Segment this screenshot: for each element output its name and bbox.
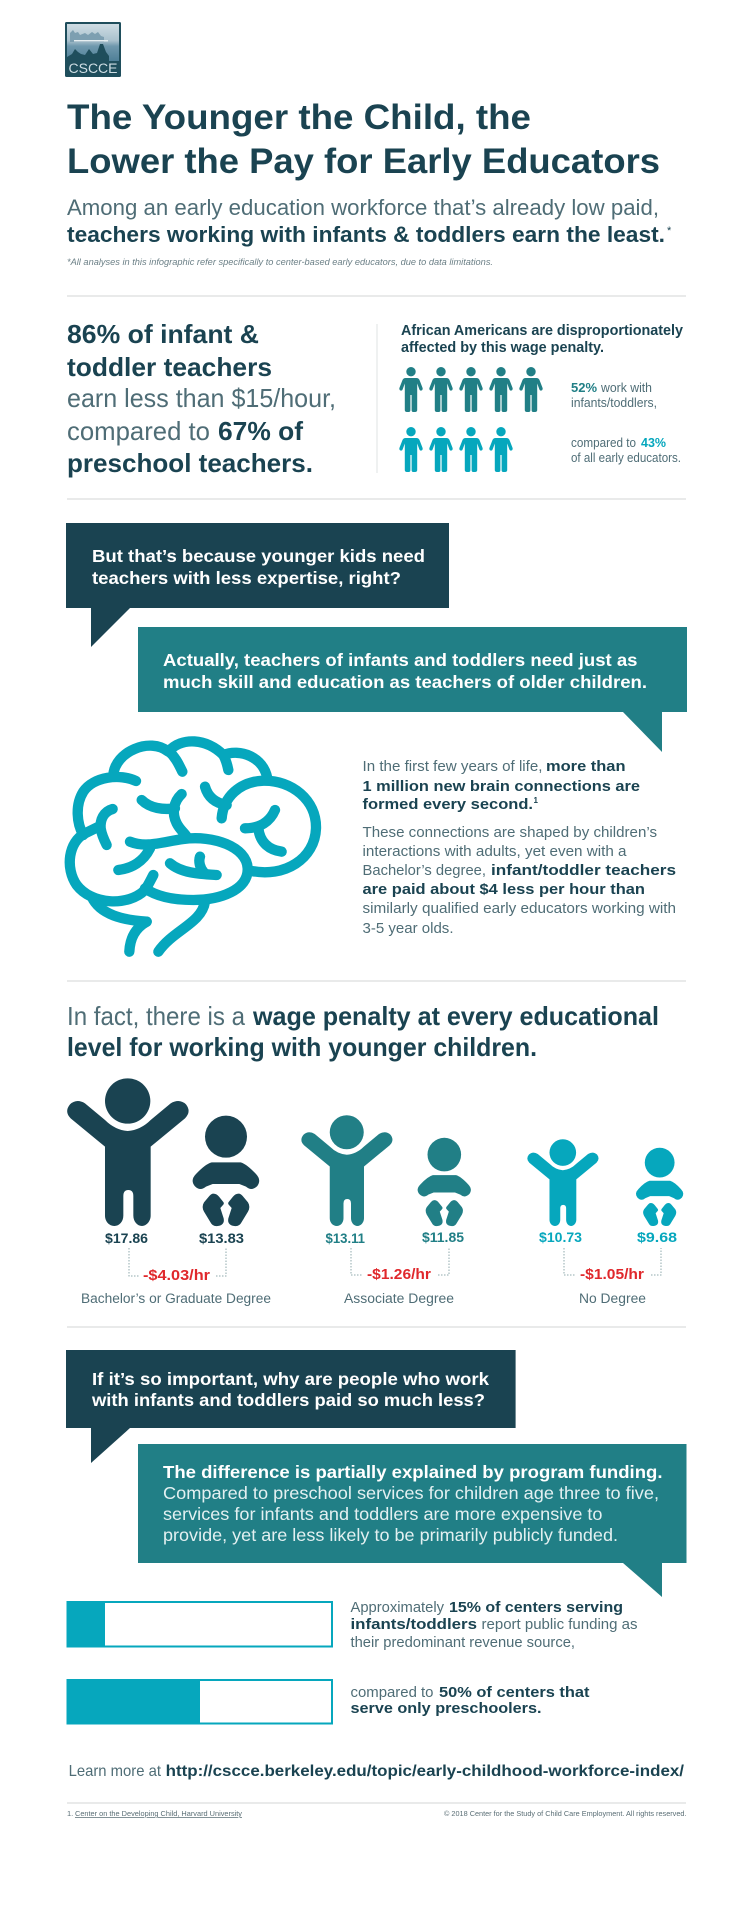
icon: baby, $11.85 [418,1138,471,1226]
icon: toddler, $13.11 [301,1115,392,1226]
text block: brain connections: In the first few years of life, [362,758,542,775]
speech bubble: answer 2: provide, yet are less likely to be primarily publicly funded. [163,1525,618,1545]
text: 52% work with infants/toddlers: 52% [571,380,597,395]
text: 15% of centers: Approximately [350,1599,444,1616]
speech bubble: question 1: But that’s because younger kids need [92,546,425,566]
speech bubble: answer 1: Actually, teachers of infants and toddlers need just as [163,650,638,670]
text: compared to 43% [571,435,681,465]
chart group: Bachelor's or Graduate Degree: Bachelor’s or Graduate Degree [81,1291,271,1306]
text: 52% work with infants/toddlers [571,380,657,410]
text: compared to 43%: 43% [641,435,666,450]
heading: wage penalty: level for working with younger children. [67,1032,537,1062]
icon row: 4 people, 43% [399,427,513,472]
chart group: Associate Degree [301,1115,471,1306]
chart group: Associate Degree: Associate Degree [344,1291,454,1306]
heading: African Americans: affected by this wage penalty. [401,340,604,356]
text: 15% of centers: report public funding as [482,1616,638,1633]
chart group: Bachelor's or Graduate Degree: -$4.03/hr [143,1268,210,1284]
footer [67,1809,686,1818]
chart group: Associate Degree: $13.11 [326,1231,365,1246]
speech bubble: question 2: If it’s so important, why are people who work [92,1369,489,1389]
text: 50% of centers [350,1684,590,1717]
text: 50% of centers: compared to [350,1684,434,1701]
heading: wage penalty [67,1001,659,1062]
speech bubble: question 2 [66,1350,516,1463]
text block: 86% statistic: earn less than $15/hour, [67,383,336,413]
text block: brain connections: These connections are shaped by children’s [362,824,657,841]
speech bubble: answer 2: The difference is partially explained by program funding. [163,1462,662,1482]
chart group: No Degree: $10.73 [539,1230,583,1245]
bar: 50% of centers [66,1679,332,1724]
subtitle: * [667,225,672,237]
speech bubble: question 2: with infants and toddlers paid so much less? [91,1390,485,1410]
title: Lower the Pay for Early Educators [67,141,660,181]
heading: wage penalty: In fact, there is a [67,1001,245,1031]
icon: toddler, $10.73 [527,1139,599,1226]
text block: brain connections [362,758,676,937]
chart group: No Degree [527,1139,683,1306]
text: 50% of centers: serve only preschoolers. [350,1700,542,1717]
text block: brain connections: interactions with adults, yet even with a [362,843,627,860]
icon row: 5 people, 52% [399,367,543,412]
chart group: No Degree: $9.68 [637,1230,678,1245]
icon: baby, $9.68 [636,1148,683,1226]
chart group: Bachelor's or Graduate Degree: $17.86 [105,1231,149,1246]
subtitle [67,195,672,247]
chart group: Associate Degree: -$1.26/hr [367,1267,431,1283]
learn more link: http://cscce.berkeley.edu/topic/early-childhood-workforce-index/ [166,1763,685,1780]
icon: baby, $13.83 [193,1116,259,1226]
speech bubble: answer 1: much skill and education as teachers of older children. [163,672,647,692]
heading: wage penalty: wage penalty at every educational [252,1001,659,1031]
icon: brain [70,741,316,952]
learn more link: Learn more at [69,1763,162,1780]
text block: brain connections: similarly qualified early educators working with [362,900,676,917]
text block: brain connections: formed every second. [362,796,533,813]
chart group: No Degree: No Degree [579,1291,646,1306]
text block: brain connections: 1 million new brain connections are [362,778,640,795]
chart group: Bachelor's or Graduate Degree: $13.83 [199,1231,245,1246]
text: compared to 43%: of all early educators. [571,450,681,465]
text: 50% of centers: 50% of centers that [439,1684,590,1701]
bar: 15% of centers [66,1601,332,1648]
text: 52% work with infants/toddlers: infants/toddlers, [571,395,657,410]
text: 52% work with infants/toddlers: work with [600,380,652,395]
icon: toddler, $17.86 [67,1078,189,1226]
text block: 86% statistic: toddler teachers [67,352,272,382]
footer: © 2018 Center for the Study of Child Care Employment. All rights reserved. [444,1809,686,1818]
text block: brain connections: are paid about $4 less per hour than [362,881,645,898]
speech bubble: question 1 [66,523,449,647]
title [67,97,660,181]
speech bubble: question 1: teachers with less expertise, right? [92,568,401,588]
logo: CSCCE: CSCCE [68,61,118,76]
footer: 1. [67,1809,73,1818]
speech bubble: answer 2: services for infants and toddlers are more expensive to [163,1504,602,1524]
speech bubble: answer 2: Compared to preschool services for children age three to five, [163,1483,659,1503]
chart group: Bachelor's or Graduate Degree [67,1078,271,1306]
text block: 86% statistic: preschool teachers. [67,448,313,478]
text block: 86% statistic: compared to [67,416,210,446]
text: compared to 43%: compared to [571,435,636,450]
text block: brain connections: 1 [534,796,538,805]
text block: 86% statistic [67,319,336,478]
logo: CSCCE [65,22,121,77]
subtitle: Among an early education workforce that’s already low paid, [67,195,659,220]
speech bubble: answer 2 [138,1444,686,1597]
text: 15% of centers: 15% of centers serving [449,1599,623,1616]
text: 15% of centers: their predominant revenue source, [350,1634,575,1651]
text block: brain connections: Bachelor’s degree, [362,862,486,879]
text block: brain connections: 3-5 year olds. [362,920,454,937]
text: 15% of centers: infants/toddlers [350,1616,477,1633]
chart group: Associate Degree: $11.85 [422,1230,465,1245]
chart group: No Degree: -$1.05/hr [580,1267,644,1283]
text block: 86% statistic: 67% of [218,416,303,446]
title: The Younger the Child, the [67,97,531,137]
heading: African Americans [401,323,683,356]
text block: brain connections: more than [546,758,626,775]
subtitle: teachers working with infants & toddlers earn the least. [67,222,665,247]
text: 15% of centers [350,1599,638,1651]
footer: Center on the Developing Child, Harvard University [75,1809,242,1818]
speech bubble: answer 1 [138,627,687,752]
text block: 86% statistic: 86% of infant & [67,319,259,349]
heading: African Americans: African Americans are disproportionately [401,323,683,339]
text block: brain connections: infant/toddler teachers [491,862,676,879]
footnote: *All analyses in this infographic refer specifically to center-based early educators, due to data limitations. [67,257,493,268]
